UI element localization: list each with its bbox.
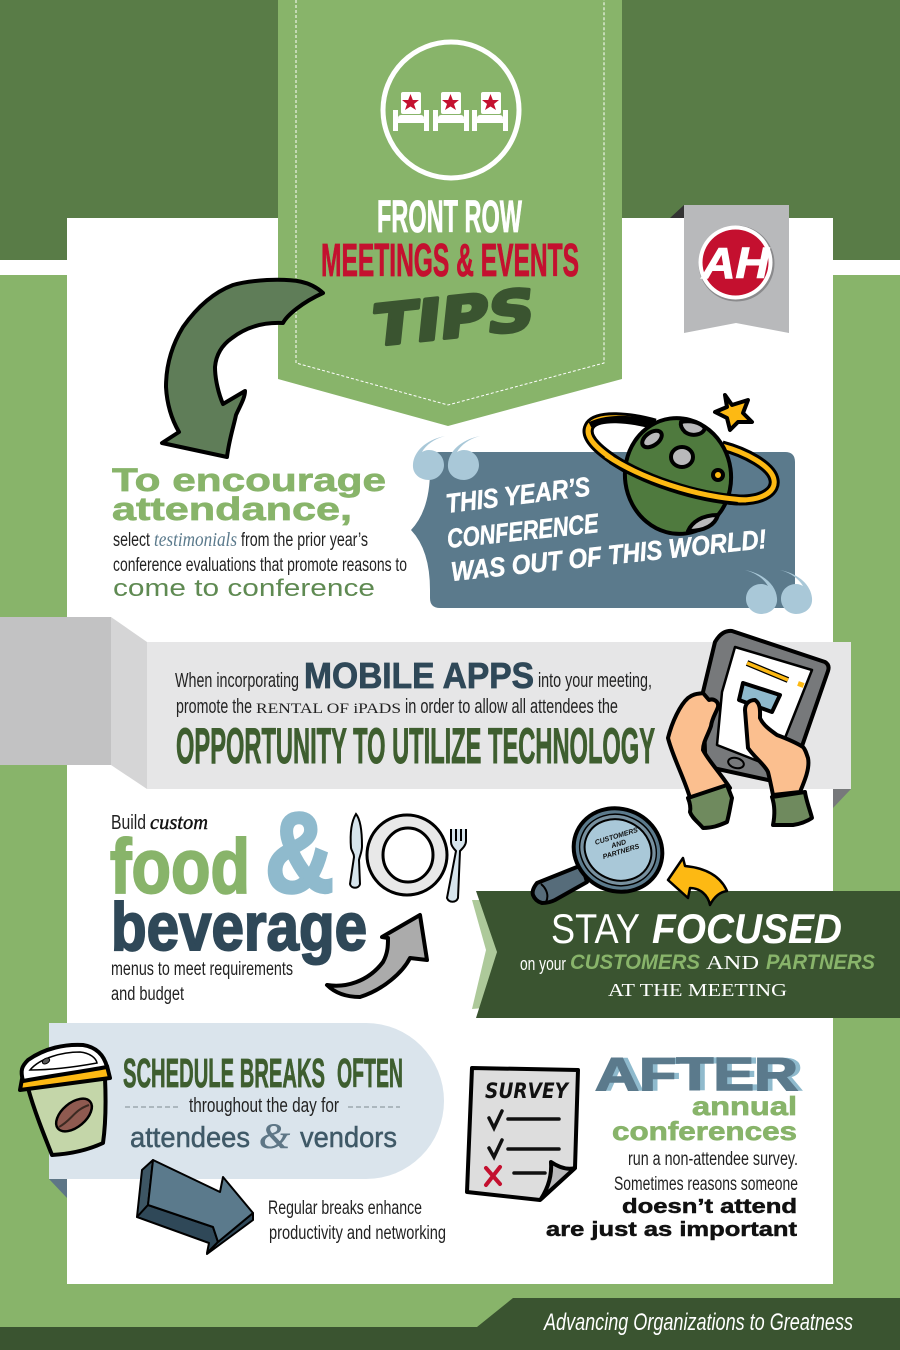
text block: after annual conferences: AFTER bbox=[600, 1048, 803, 1100]
text block: food and beverage: custom bbox=[150, 810, 208, 834]
icon: hands holding tablet bbox=[668, 631, 829, 828]
panel: schedule breaks: SCHEDULE BREAKS bbox=[123, 1050, 325, 1096]
text block: food and beverage: food bbox=[110, 824, 250, 910]
text block: after annual conferences: AFTER bbox=[595, 1048, 798, 1100]
panel: schedule breaks: throughout the day for bbox=[189, 1095, 339, 1117]
footer band bbox=[0, 1298, 900, 1350]
text block: regular breaks: productivity and networking bbox=[269, 1223, 446, 1244]
title: meetings and events: MEETINGS & EVENTS bbox=[321, 234, 579, 286]
text block: after annual conferences: annual bbox=[692, 1091, 797, 1121]
text block: encourage attendance: from the prior year’s bbox=[241, 530, 368, 551]
text block: food and beverage: and budget bbox=[111, 984, 185, 1005]
panel: schedule breaks bbox=[20, 1023, 444, 1198]
text block: encourage attendance bbox=[112, 462, 407, 602]
opening quote marks bbox=[413, 436, 480, 480]
text block: encourage attendance: To encourage bbox=[112, 462, 386, 498]
panel: schedule breaks: OFTEN bbox=[337, 1050, 403, 1096]
panel: testimonial quote bbox=[411, 395, 812, 614]
badge: AH logo bbox=[670, 205, 789, 333]
icon: plate and cutlery bbox=[350, 814, 466, 902]
panel: mobile apps ribbon: MOBILE APPS bbox=[304, 655, 534, 696]
text block: after annual conferences: Sometimes reasons someone bbox=[614, 1174, 798, 1195]
text block: encourage attendance: testimonials bbox=[154, 529, 237, 551]
panel: stay focused: AT THE MEETING bbox=[608, 980, 787, 1000]
panel: schedule breaks: vendors bbox=[300, 1122, 397, 1154]
icon: magnifying glass: CUSTOMERS bbox=[594, 827, 639, 847]
panel: mobile apps ribbon: in order to allow all attendees the bbox=[405, 696, 618, 718]
title: front row: FRONT ROW bbox=[377, 191, 522, 242]
icon: survey sheet bbox=[467, 1068, 578, 1200]
icon: front row seats bbox=[383, 42, 519, 178]
arrow: yellow curved bbox=[668, 858, 727, 905]
icon: magnifying glass: AND bbox=[610, 839, 627, 850]
text block: after annual conferences: doesn’t attend bbox=[622, 1196, 797, 1218]
panel: schedule breaks: & bbox=[259, 1116, 290, 1156]
panel: stay focused: on your bbox=[520, 954, 566, 974]
closing quote marks bbox=[745, 570, 812, 614]
quote text: CONFERENCE bbox=[445, 508, 601, 554]
panel: mobile apps ribbon: RENTAL OF iPADS bbox=[256, 701, 401, 717]
icon: survey sheet: SURVEY bbox=[485, 1079, 570, 1103]
badge: AH logo: AH bbox=[701, 239, 770, 288]
icon: star bbox=[715, 395, 752, 430]
panel: mobile apps ribbon: into your meeting, bbox=[538, 670, 652, 692]
quote text bbox=[444, 472, 768, 587]
quote text: THIS YEAR’S bbox=[444, 472, 592, 519]
panel: mobile apps ribbon bbox=[0, 617, 851, 828]
panel: mobile apps ribbon: promote the bbox=[176, 696, 252, 718]
text block: food and beverage: beverage bbox=[111, 889, 367, 965]
panel: schedule breaks: attendees bbox=[130, 1122, 250, 1154]
text block: after annual conferences bbox=[546, 1048, 803, 1241]
text block: encourage attendance: attendance, bbox=[112, 491, 352, 527]
text block: after annual conferences: conferences bbox=[612, 1116, 797, 1146]
text block: encourage attendance: come to conference bbox=[113, 575, 375, 602]
panel: stay focused: CUSTOMERS bbox=[570, 951, 700, 974]
icon: magnifying glass: PARTNERS bbox=[602, 843, 641, 861]
panel: stay focused: PARTNERS bbox=[766, 951, 875, 974]
text block: food and beverage: Build bbox=[111, 812, 146, 834]
panel: stay focused: AND bbox=[706, 952, 759, 974]
text block: food and beverage bbox=[110, 790, 367, 1005]
icon: magnifying glass bbox=[533, 794, 676, 906]
text block: regular breaks bbox=[268, 1198, 446, 1244]
text block: food and beverage: menus to meet requirements bbox=[111, 959, 293, 980]
text block: food and beverage: & bbox=[265, 790, 334, 917]
panel: stay focused bbox=[472, 794, 900, 1018]
title banner bbox=[278, 0, 622, 426]
title: tips: TIPS bbox=[370, 277, 538, 360]
arrow: blue 3D bbox=[137, 1160, 253, 1254]
text block: encourage attendance: select bbox=[113, 530, 151, 551]
text block: after annual conferences: run a non-attendee survey. bbox=[628, 1149, 798, 1170]
text block: after annual conferences: are just as important bbox=[546, 1219, 797, 1241]
text block: encourage attendance: conference evaluations that promote reasons to bbox=[113, 555, 407, 576]
panel: stay focused: FOCUSED bbox=[652, 905, 842, 952]
text block: regular breaks: Regular breaks enhance bbox=[268, 1198, 422, 1219]
arrow: large green curved bbox=[162, 280, 323, 457]
icon: ringed planet bbox=[588, 395, 774, 541]
arrow: gray curved up bbox=[327, 915, 427, 997]
panel: stay focused: STAY bbox=[551, 905, 640, 952]
quote text: WAS OUT OF THIS WORLD! bbox=[449, 524, 768, 587]
panel: mobile apps ribbon: When incorporating bbox=[175, 670, 299, 692]
icon: coffee cup bbox=[20, 1045, 110, 1155]
